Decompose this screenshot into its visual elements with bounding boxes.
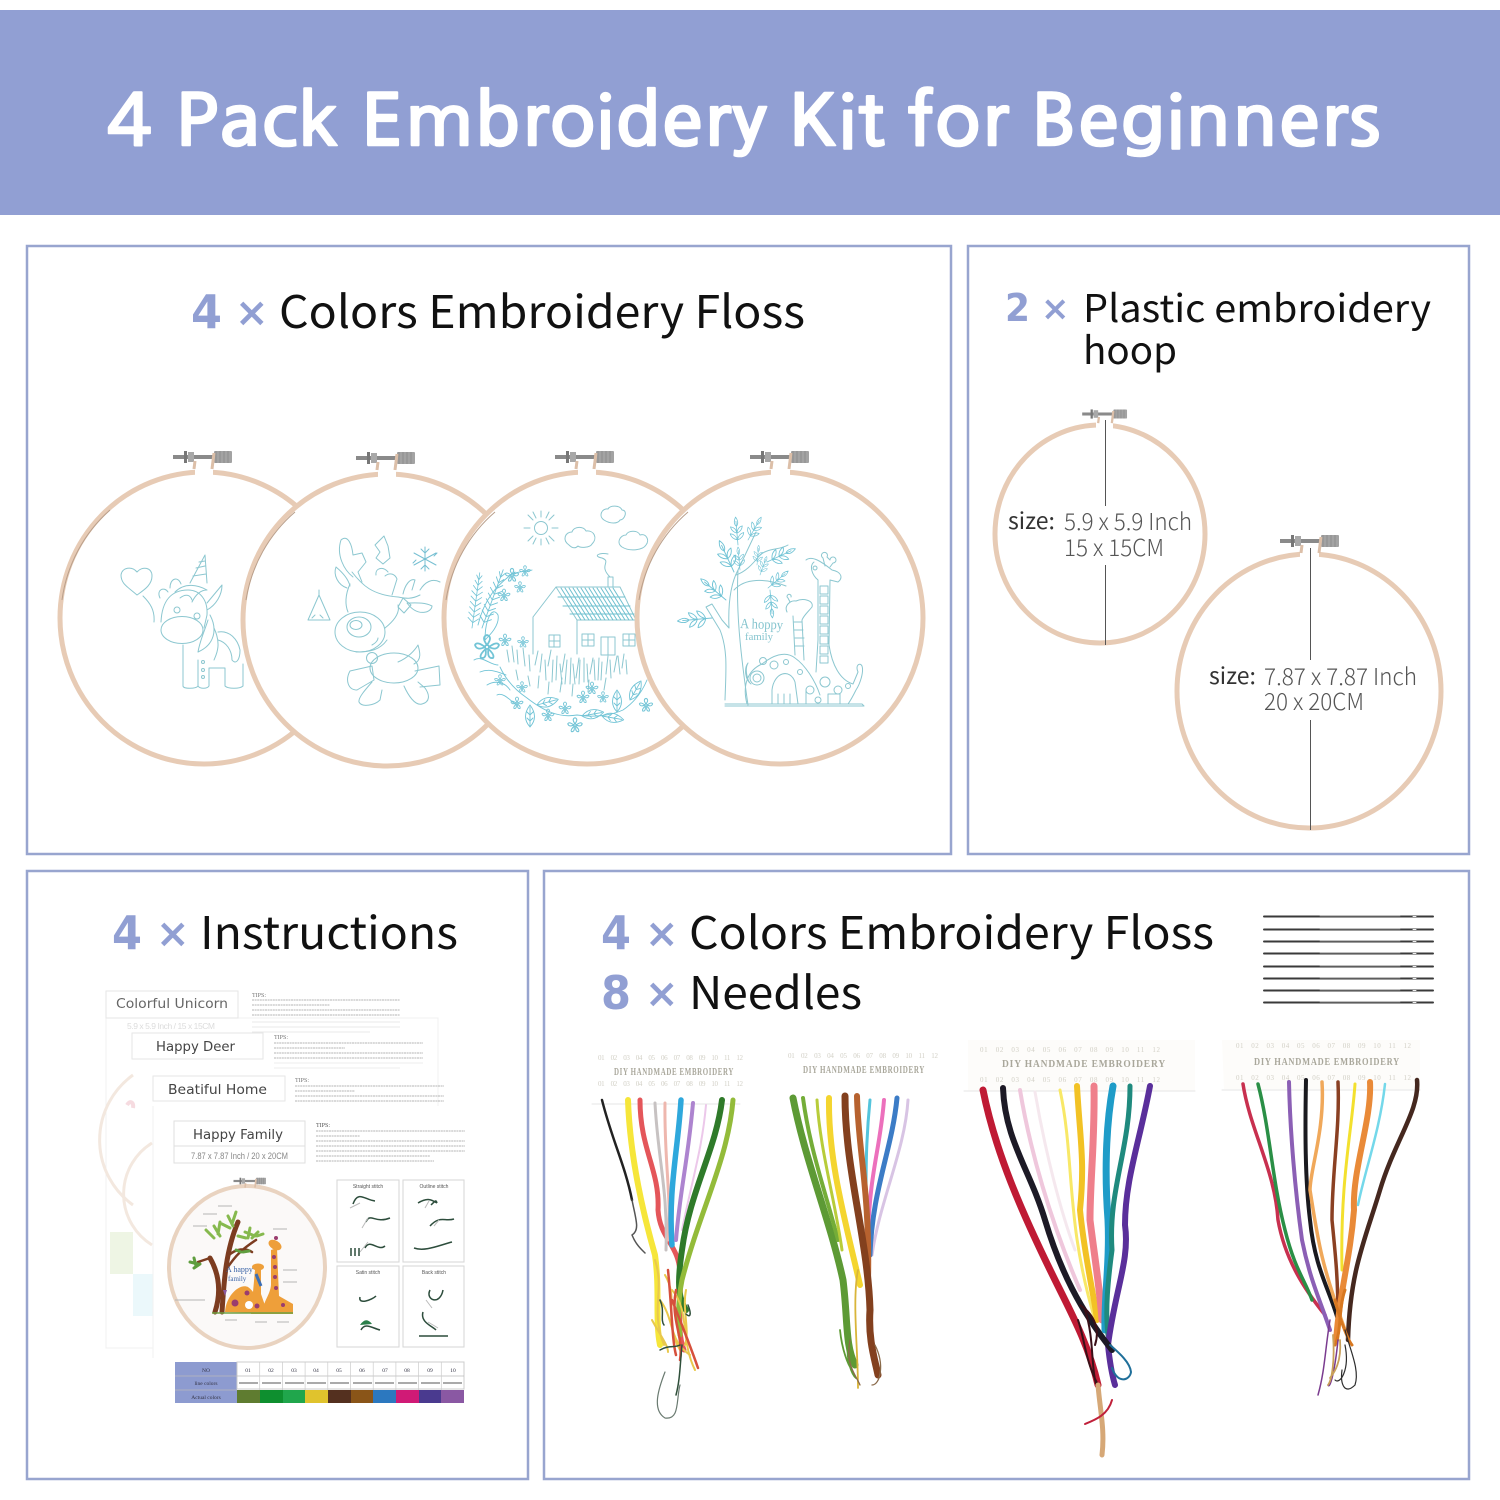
panel: instructions (27, 871, 528, 1479)
colour table: 09 (427, 1368, 433, 1374)
wreath (467, 566, 653, 732)
instruction sheet: Beatiful Home: TIPS: (295, 1078, 309, 1084)
colour table: 04 (313, 1368, 319, 1374)
colour table: line colors (194, 1381, 218, 1387)
heading: 2 x Plastic embroidery hoop: × (1041, 289, 1070, 329)
heading: 4 x Colors Embroidery Floss: Colors Embroidery Floss (689, 897, 1214, 962)
heading: 2 x Plastic embroidery hoop: 2 (1005, 286, 1030, 330)
hoop: large 20cm (1177, 535, 1441, 830)
title box: 7.87 x 7.87 Inch / 20 x 20CM (191, 1151, 288, 1161)
instruction sheet: Colorful Unicorn (100, 991, 438, 1348)
tree (706, 532, 864, 706)
text: A happy: A hoppy (740, 617, 783, 633)
giraffes (223, 1238, 293, 1314)
title box (174, 1121, 305, 1163)
floss bundle 1 (592, 1054, 744, 1418)
colour table: Actual colors (191, 1395, 221, 1401)
instruction sheet: Beatiful Home (153, 1076, 444, 1101)
instruction sheet: Beatiful Home: Beatiful Home (168, 1082, 267, 1098)
hoop: deer (243, 452, 531, 766)
colour table: NO (202, 1368, 210, 1374)
instruction sheet: Happy Deer (124, 1033, 423, 1316)
title banner (0, 10, 1500, 215)
size label large: size: (1209, 657, 1256, 691)
heading: 2 x Plastic embroidery hoop (1005, 278, 1431, 375)
card numbers: 01 02 03 04 05 06 07 08 09 10 11 12 (1236, 1074, 1412, 1082)
card (1222, 1040, 1420, 1089)
instruction sheet: Colorful Unicorn: 5.9 x 5.9 Inch / 15 x 15CM (127, 1021, 215, 1031)
colour table: 03 (291, 1368, 297, 1374)
card (968, 1040, 1195, 1091)
card label: DIY HANDMADE EMBROIDERY (614, 1066, 734, 1078)
card numbers: 01 02 03 04 05 06 07 08 09 10 11 12 (980, 1046, 1160, 1054)
hoop: house (444, 451, 730, 764)
size label small: size: (1008, 502, 1055, 536)
instruction sheet: Happy Deer: TIPS: (274, 1035, 288, 1041)
heading: 2 x Plastic embroidery hoop: Plastic embroidery (1083, 278, 1431, 333)
panel: floss and needles (544, 871, 1469, 1479)
card numbers: 01 02 03 04 05 06 07 08 09 10 11 12 (598, 1054, 744, 1062)
heading: 4 x Instructions: 4 (112, 906, 142, 960)
stitch diagrams: Back stitch (422, 1270, 446, 1276)
heading: 4 x Colors Embroidery Floss: × (645, 911, 679, 957)
size label small (1008, 502, 1192, 563)
stitch diagrams: Outline stitch (420, 1184, 449, 1190)
size label small: 15 x 15CM (1064, 529, 1164, 563)
card label: DIY HANDMADE EMBROIDERY (803, 1064, 925, 1076)
panel: plastic hoops (968, 246, 1469, 854)
lettering: A happy: A happy (226, 1265, 253, 1274)
heading: 4 x Instructions: × (156, 911, 190, 957)
instruction sheet: Colorful Unicorn: TIPS: (252, 993, 266, 999)
hoop: giraffes (637, 451, 923, 764)
instruction sheet: Colorful Unicorn: Colorful Unicorn (116, 996, 228, 1012)
colour table (175, 1362, 464, 1403)
stitch diagrams: Satin stitch (356, 1270, 380, 1276)
heading: 8 x Needles: Needles (689, 957, 862, 1022)
panel: embroidery floss hoops (27, 246, 951, 854)
icon: needles (1264, 916, 1433, 1002)
heading: 4 x Colors Embroidery Floss: Colors Embroidery Floss (279, 276, 805, 341)
colour table: 05 (336, 1368, 342, 1374)
heading: 4 x Colors Embroidery Floss: 4 (191, 285, 222, 339)
tips text: TIPS: (316, 1123, 330, 1129)
colour table: 06 (359, 1368, 365, 1374)
floss bundle 3 (964, 1040, 1195, 1455)
card label: DIY HANDMADE EMBROIDERY (1254, 1056, 1400, 1068)
title box: Happy Family (193, 1127, 283, 1143)
leaves (677, 514, 799, 629)
colour table: 01 (245, 1368, 251, 1374)
colour table: 02 (268, 1368, 274, 1374)
card numbers: 01 02 03 04 05 06 07 08 09 10 11 12 (1236, 1042, 1412, 1050)
heading: 4 x Instructions: Instructions (200, 897, 458, 962)
heading: 4 x Colors Embroidery Floss: × (235, 290, 269, 336)
colour table: 08 (404, 1368, 410, 1374)
giraffes (745, 552, 863, 704)
heading: 8 x Needles: 8 (601, 966, 631, 1020)
heading: 8 x Needles: × (645, 971, 679, 1017)
heading: 8 x Needles (601, 957, 862, 1022)
card numbers: 01 02 03 04 05 06 07 08 09 10 11 12 (980, 1076, 1160, 1084)
text: family: family (745, 631, 773, 643)
stitch diagrams: Straight stitch (353, 1184, 383, 1190)
card label: DIY HANDMADE EMBROIDERY (1002, 1058, 1166, 1070)
sun and clouds (524, 506, 648, 550)
tree (198, 1222, 256, 1312)
card numbers: 01 02 03 04 05 06 07 08 09 10 11 12 (788, 1052, 938, 1060)
heading: 2 x Plastic embroidery hoop: hoop (1083, 320, 1177, 375)
size label large: 20 x 20CM (1264, 683, 1364, 717)
stitch diagrams (337, 1180, 464, 1347)
size label large: 7.87 x 7.87 Inch (1264, 658, 1417, 692)
title: 4 Pack Embroidery Kit for Beginners (106, 85, 1381, 157)
card numbers: 01 02 03 04 05 06 07 08 09 10 11 12 (598, 1080, 744, 1088)
size label small: 5.9 x 5.9 Inch (1064, 503, 1192, 537)
finished hoop photo (169, 1178, 325, 1348)
instruction sheet: Happy Family (153, 1106, 478, 1403)
tips text (316, 1123, 465, 1161)
instruction sheet: Happy Deer: Happy Deer (156, 1039, 235, 1055)
lettering: family: family (228, 1275, 247, 1283)
hoop: small 15cm (995, 409, 1205, 645)
house drawing (507, 553, 636, 696)
floss bundle 2 (788, 1052, 938, 1388)
hoop: unicorn (60, 451, 348, 764)
colour table: 07 (382, 1368, 388, 1374)
floss bundle 4 (1222, 1040, 1420, 1395)
size label large (1209, 657, 1417, 717)
colour table: 10 (450, 1368, 456, 1374)
heading: 4 x Colors Embroidery Floss: 4 (601, 906, 631, 960)
